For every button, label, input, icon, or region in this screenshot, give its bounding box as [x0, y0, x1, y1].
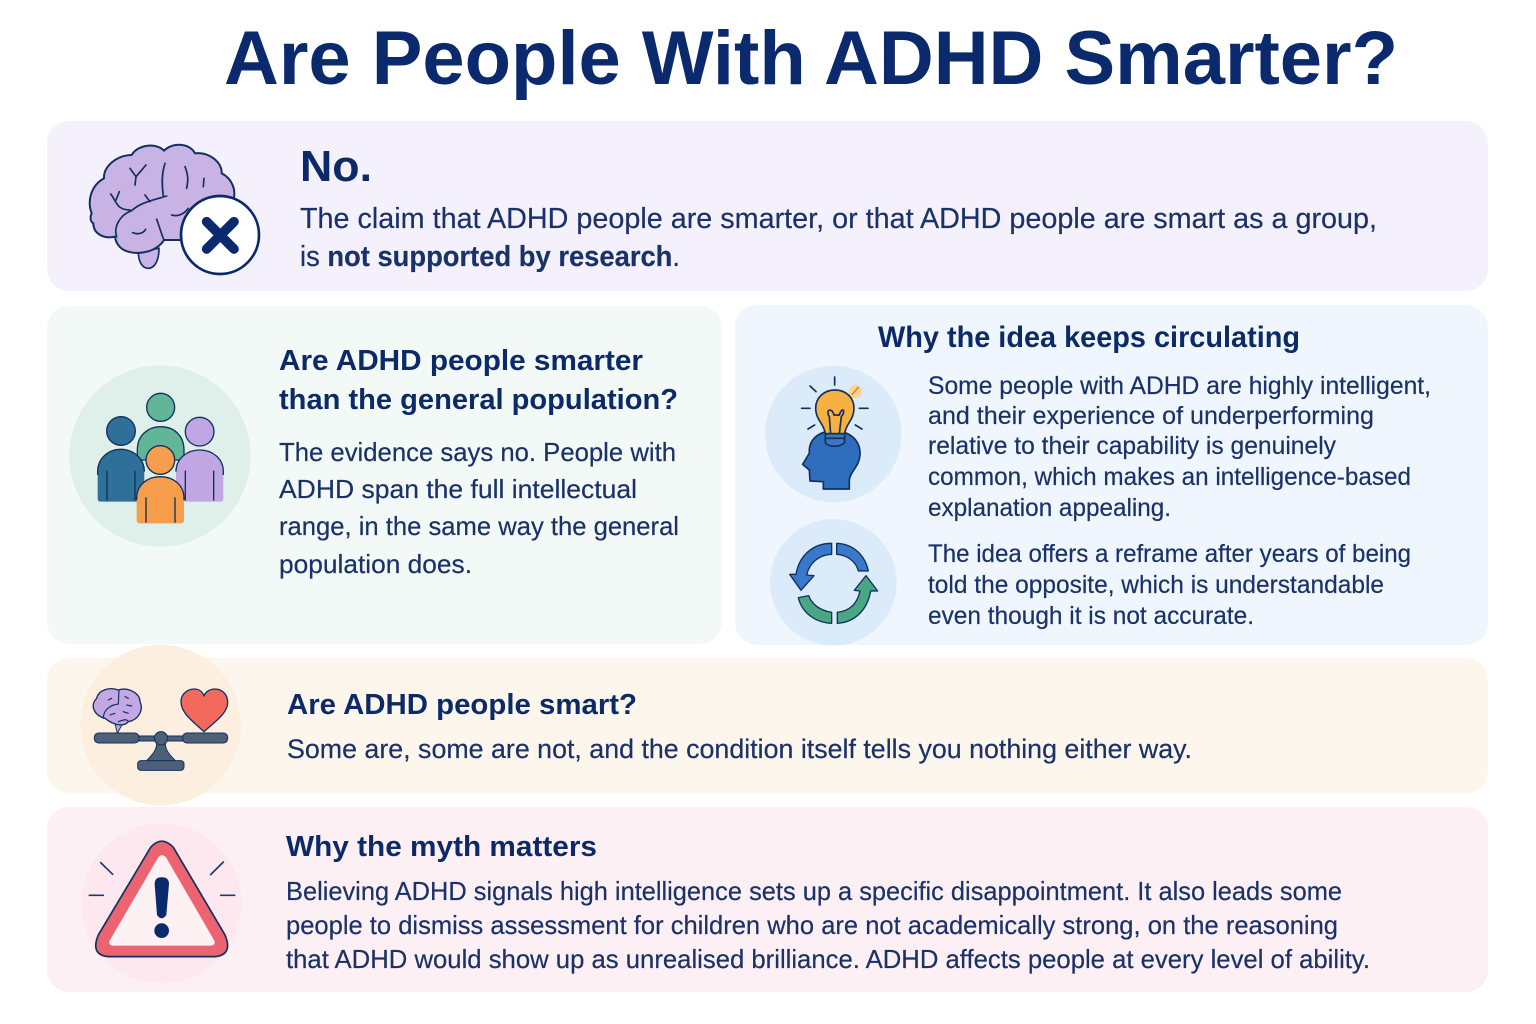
verdict text: is not supported by research.	[300, 241, 680, 273]
title: Are People With ADHD Smarter?	[224, 16, 1398, 101]
verdict text: The claim that ADHD people are smarter, or that ADHD people are smart as a group,	[300, 203, 1377, 235]
panel: are ADHD people smart	[47, 645, 1488, 805]
icon: balance scale	[80, 645, 241, 805]
heading: circulating: Why the idea keeps circulating	[878, 321, 1300, 354]
body: evidence	[279, 437, 679, 579]
body: myth explanation: that ADHD would show up as unrealised brilliance. ADHD affects people at every level of ability.	[286, 944, 1370, 974]
icon: lightbulb over head	[765, 366, 902, 502]
body: evidence: range, in the same way the general	[279, 511, 679, 541]
heading: myth: Why the myth matters	[286, 831, 597, 863]
icon: warning triangle	[82, 823, 242, 983]
body: reframe	[928, 540, 1411, 630]
body: intelligence explanation	[928, 372, 1431, 522]
body: intelligence explanation: common, which makes an intelligence-based	[928, 463, 1411, 491]
body: evidence: ADHD span the full intellectual	[279, 474, 637, 504]
panel: verdict	[47, 121, 1488, 291]
panel: smarter than general population	[47, 306, 722, 644]
body: intelligence explanation: and their experience of underperforming	[928, 402, 1374, 430]
body: smart answer: Some are, some are not, and the condition itself tells you nothing either way.	[287, 734, 1192, 764]
icon: group of people	[69, 365, 251, 547]
body: evidence: The evidence says no. People with	[279, 437, 676, 467]
panel: why the idea keeps circulating	[735, 305, 1488, 646]
heading: smarter than population: than the general population?	[279, 384, 678, 416]
body: reframe: The idea offers a reframe after years of being	[928, 540, 1411, 568]
verdict text	[300, 203, 1377, 273]
icon: brain with cross	[90, 145, 259, 274]
panel: why the myth matters	[47, 807, 1488, 992]
body: myth explanation: people to dismiss assessment for children who are not academically strong, on the reasoning	[286, 910, 1338, 940]
heading: smarter than population	[279, 345, 678, 416]
heading: smart: Are ADHD people smart?	[287, 689, 637, 721]
body: evidence: population does.	[279, 549, 472, 579]
body: intelligence explanation: explanation appealing.	[928, 494, 1171, 522]
body: myth explanation	[286, 876, 1370, 974]
body: reframe: told the opposite, which is understandable	[928, 571, 1384, 599]
body: intelligence explanation: relative to their capability is genuinely	[928, 432, 1336, 460]
body: reframe: even though it is not accurate.	[928, 602, 1254, 630]
body: intelligence explanation: Some people with ADHD are highly intelligent,	[928, 372, 1431, 400]
body: myth explanation: Believing ADHD signals high intelligence sets up a specific disappointment. It also leads some	[286, 876, 1342, 906]
icon: circular arrows	[770, 519, 897, 646]
verdict heading: No.	[300, 142, 372, 191]
heading: smarter than population: Are ADHD people smarter	[279, 345, 643, 377]
